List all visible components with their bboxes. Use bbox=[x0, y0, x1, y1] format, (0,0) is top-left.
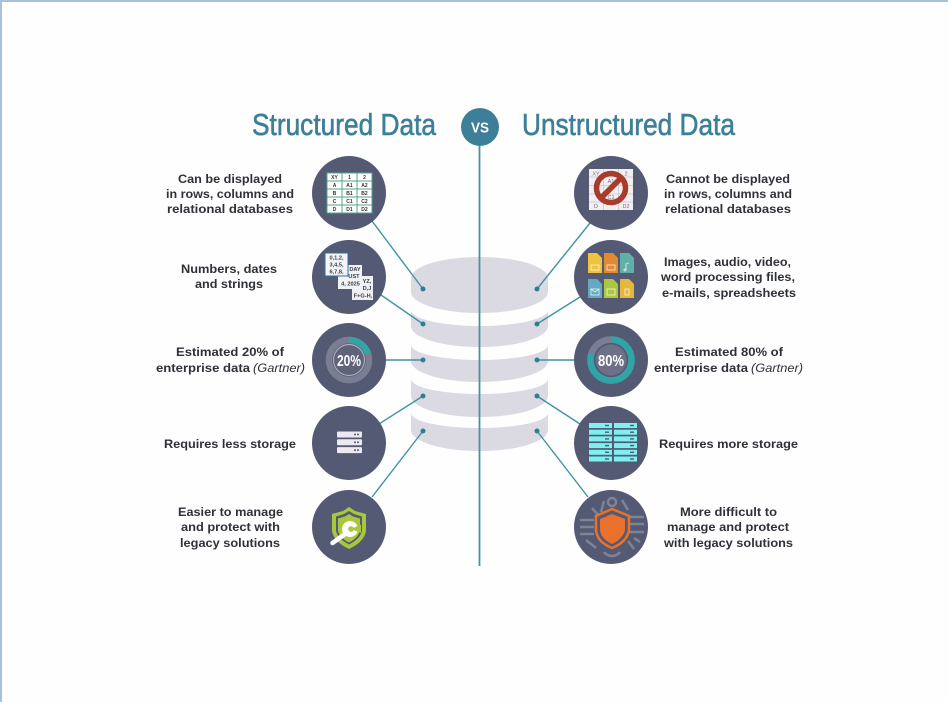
text: estimated 80%: enterprise data bbox=[654, 361, 748, 375]
icon: number and date cards bbox=[312, 240, 386, 314]
icon: small server stack bbox=[312, 406, 386, 480]
text: more difficult to manage: More difficult to bbox=[680, 505, 777, 519]
icon: number and date cards: D,J bbox=[363, 286, 371, 292]
text: estimated 80% bbox=[654, 345, 803, 375]
icon: table in rows and columns: B1 bbox=[346, 191, 353, 197]
icon: table in rows and columns: C bbox=[333, 199, 337, 205]
text: cannot be displayed: in rows, columns and bbox=[664, 187, 792, 201]
text: displayed in rows (structured): relational databases bbox=[167, 202, 293, 216]
icon: table in rows and columns: C1 bbox=[346, 199, 353, 205]
text: cannot be displayed bbox=[664, 172, 792, 216]
icon: large server racks bbox=[574, 406, 648, 480]
text: estimated 80%: Estimated 80% of bbox=[675, 345, 784, 359]
icon: table in rows and columns: XY bbox=[331, 175, 338, 181]
text: cannot be displayed: relational databases bbox=[665, 202, 791, 216]
icon: file type documents bbox=[574, 240, 648, 314]
icon: prohibited table: 2 bbox=[624, 172, 628, 178]
heading: Unstructured Data: Unstructured Data bbox=[522, 107, 736, 142]
connectors: unstructured side bbox=[534, 223, 590, 497]
text: more difficult to manage bbox=[663, 505, 793, 550]
icon: table in rows and columns: D1 bbox=[346, 207, 353, 213]
icon: number and date cards: 3,4,5, bbox=[330, 262, 344, 268]
text: numbers, dates and strings: Numbers, dates bbox=[181, 262, 277, 276]
text: cannot be displayed: Cannot be displayed bbox=[666, 172, 790, 186]
icon: prohibited table: D bbox=[594, 204, 598, 210]
text: displayed in rows (structured): Can be displayed bbox=[178, 172, 282, 186]
text: estimated 20%: (Gartner) bbox=[253, 361, 305, 375]
text: images, audio, video: Images, audio, video, bbox=[664, 255, 791, 269]
icon: number and date cards: 0,1,2, bbox=[330, 256, 344, 262]
database cylinder bbox=[411, 257, 548, 451]
icon: green shield with wrench bbox=[312, 490, 386, 564]
icon: table in rows and columns: D bbox=[333, 207, 337, 213]
icon: table in rows and columns: 1 bbox=[348, 175, 351, 181]
icon: table in rows and columns: D2 bbox=[361, 207, 368, 213]
icon: number and date cards: UST bbox=[348, 274, 360, 280]
text: images, audio, video: word processing files, bbox=[660, 270, 795, 284]
text: estimated 20%: enterprise data bbox=[156, 361, 250, 375]
text: easier to manage: legacy solutions bbox=[180, 536, 280, 550]
text: requires more storage: Requires more storage bbox=[659, 437, 798, 451]
icon: table in rows and columns: 2 bbox=[363, 175, 366, 181]
icon: prohibited table: A1 bbox=[608, 179, 614, 185]
icon: table in rows and columns: A1 bbox=[346, 183, 353, 189]
text: more difficult to manage: manage and protect bbox=[667, 520, 789, 534]
text: requires less storage: Requires less storage bbox=[164, 437, 296, 451]
icon: prohibited table: C1 bbox=[607, 195, 615, 201]
icon: prohibited table bbox=[574, 156, 648, 230]
centre divider line bbox=[478, 140, 480, 566]
icon: 80 percent donut bbox=[574, 323, 648, 397]
text: images, audio, video: e-mails, spreadsheets bbox=[662, 286, 796, 300]
icon: number and date cards: 4, 2025 bbox=[341, 282, 360, 288]
icon: 20 percent donut: 20% bbox=[337, 353, 361, 370]
icon: table in rows and columns bbox=[312, 156, 386, 230]
text: numbers, dates and strings bbox=[181, 262, 277, 291]
connectors: structured side bbox=[372, 221, 426, 497]
icon: prohibited table: XY bbox=[592, 172, 600, 178]
icon: prohibited table: D2 bbox=[622, 204, 630, 210]
icon: table in rows and columns: A bbox=[333, 183, 337, 189]
icon: number and date cards: F+G-H, bbox=[354, 294, 373, 300]
text: easier to manage: Easier to manage bbox=[178, 505, 283, 519]
icon: table in rows and columns: C2 bbox=[361, 199, 368, 205]
icon: number and date cards: 6,7,8, bbox=[330, 270, 344, 276]
text: displayed in rows (structured) bbox=[166, 172, 294, 216]
text: estimated 20%: Estimated 20% of bbox=[176, 345, 285, 359]
text: estimated 20% bbox=[156, 345, 305, 375]
icon: 20 percent donut bbox=[312, 323, 386, 397]
icon: table in rows and columns: B bbox=[333, 191, 337, 197]
VS badge bbox=[461, 108, 499, 146]
icon: 80 percent donut: 80% bbox=[598, 353, 624, 370]
text: estimated 80%: (Gartner) bbox=[751, 361, 803, 375]
icon: orange shield with tools bbox=[574, 490, 648, 564]
text: displayed in rows (structured): in rows, columns and bbox=[166, 187, 294, 201]
icon: number and date cards: DAY bbox=[349, 267, 361, 273]
text: more difficult to manage: with legacy solutions bbox=[663, 536, 793, 550]
heading: Structured Data: Structured Data bbox=[252, 107, 437, 142]
text: easier to manage: and protect with bbox=[181, 520, 280, 534]
VS badge: VS bbox=[471, 120, 489, 136]
icon: number and date cards: YZ, bbox=[363, 279, 372, 285]
text: images, audio, video bbox=[660, 255, 796, 300]
icon: table in rows and columns: A2 bbox=[361, 183, 368, 189]
text: numbers, dates and strings: and strings bbox=[195, 277, 263, 291]
icon: table in rows and columns: B2 bbox=[361, 191, 368, 197]
text: easier to manage bbox=[178, 505, 283, 550]
